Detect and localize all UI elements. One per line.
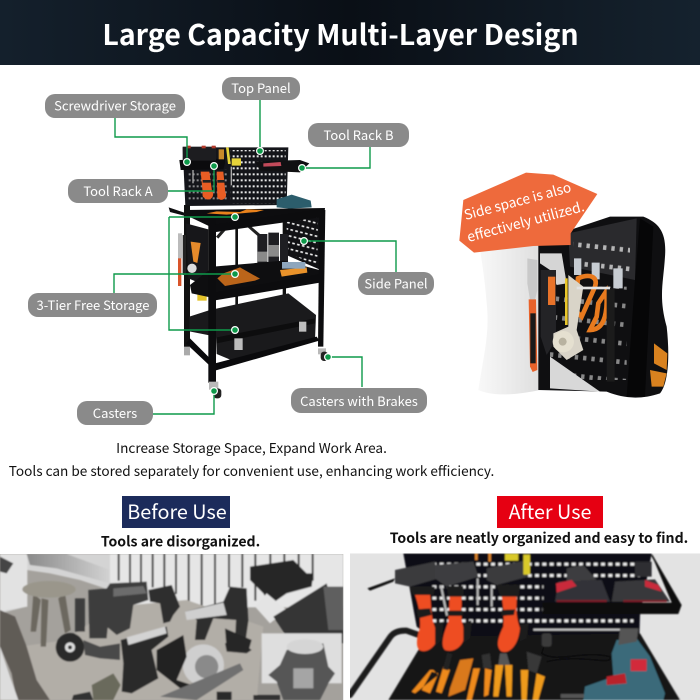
side panel [284, 212, 321, 269]
side hooks with tools [178, 223, 208, 301]
before caption: Tools are disorganized. [101, 532, 260, 552]
tray [388, 633, 680, 700]
callout: side panel [301, 238, 434, 295]
box and router [262, 633, 342, 683]
blue drill [561, 628, 665, 700]
three orange drills [367, 553, 530, 652]
side detail image [459, 173, 668, 398]
header banner [0, 0, 700, 65]
drills upper right [250, 560, 313, 605]
callout: tool rack B: Tool Rack B [324, 125, 393, 144]
callout: screwdriver storage [45, 94, 190, 165]
person at left [0, 610, 50, 700]
after caption: Tools are neatly organized and easy to find. [390, 528, 688, 548]
back legs [184, 205, 190, 348]
callout: 3-tier free storage [28, 214, 238, 333]
middle shelf [190, 261, 320, 298]
tool rack B [255, 160, 309, 172]
callout: top panel: Top Panel [231, 78, 291, 97]
callout: casters [77, 388, 217, 425]
rotary hammer [121, 627, 168, 693]
callouts [28, 77, 434, 425]
callout: tool rack B [299, 123, 409, 171]
after use badge: After Use [509, 496, 591, 525]
battery [92, 673, 121, 700]
paint cans [257, 233, 288, 269]
black pegboard [538, 217, 668, 398]
stool [22, 581, 76, 647]
tag text: effectively utilized. [465, 195, 586, 246]
white backdrop [478, 243, 540, 394]
circular saw [183, 644, 224, 686]
nailer tool [88, 582, 148, 638]
product image: tool cart [169, 146, 328, 398]
bottom shelf and front legs [186, 337, 319, 371]
top tray [169, 207, 325, 227]
top pegboard [179, 146, 288, 206]
photo: organized tools [350, 553, 700, 700]
tag text: Side space is also [462, 176, 573, 224]
toolbox [189, 293, 316, 362]
callout: casters with brakes: Casters with Brakes [300, 391, 418, 410]
hanging tools [527, 253, 623, 382]
before use badge: Before Use [127, 496, 227, 525]
intro text [9, 437, 494, 480]
photo: disorganized tools [0, 554, 343, 700]
blue drill on top tray [277, 195, 312, 209]
impact driver [185, 587, 252, 653]
callout: side panel: Side Panel [364, 274, 428, 292]
callout: casters: Casters [93, 403, 137, 422]
grinder [56, 633, 84, 662]
intro text: Tools can be stored separately for convenient use, enhancing work efficiency. [9, 460, 494, 480]
callout: tool rack A [68, 163, 217, 203]
callout: 3-tier free storage: 3-Tier Free Storage [36, 295, 150, 314]
intro text: Increase Storage Space, Expand Work Area. [116, 437, 387, 457]
callout: top panel [222, 77, 300, 154]
casters [184, 347, 328, 398]
pegboard back [403, 553, 652, 637]
callout: tool rack A: Tool Rack A [83, 181, 153, 200]
tool rack shelf with batteries [543, 555, 682, 614]
callout: casters with brakes [291, 354, 427, 413]
title: Large Capacity Multi-Layer Design [102, 13, 579, 54]
orange tag [459, 173, 597, 253]
side handle [350, 631, 422, 695]
cord [541, 648, 610, 662]
pliers and hand tools [412, 652, 545, 700]
callout: screwdriver storage: Screwdriver Storage [54, 96, 176, 114]
